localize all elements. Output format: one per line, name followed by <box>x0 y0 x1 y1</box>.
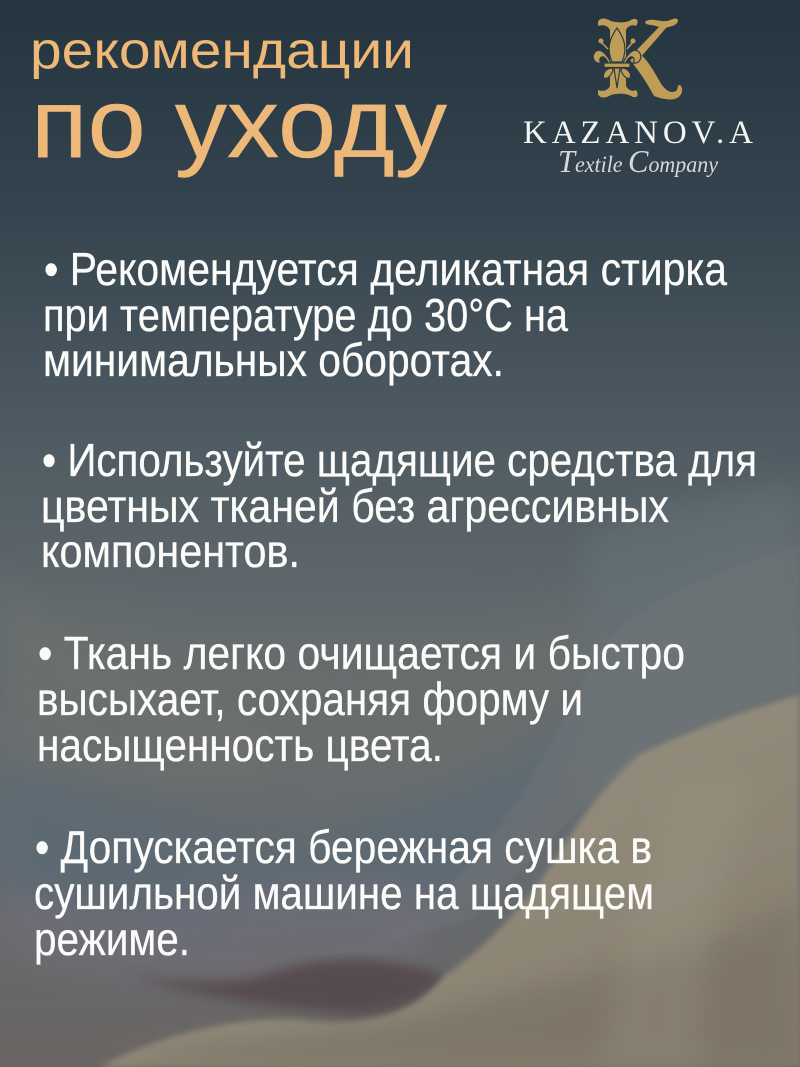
fleur-de-lis <box>593 28 641 88</box>
icon: gold monogram K with fleur-de-lis <box>593 18 682 99</box>
text block: fabric care <box>37 627 685 771</box>
heading: рекомендации по уходу <box>30 22 447 178</box>
text block: fabric care: • Ткань легко очищается и быстро <box>38 627 685 679</box>
text block: detergents: компонентов. <box>41 525 300 577</box>
arm and leg <box>632 18 678 58</box>
text block: drying <box>34 821 654 965</box>
text block: fabric care: насыщенность цвета. <box>37 719 443 771</box>
logo name: KAZANOV.A <box>523 115 753 151</box>
text block: detergents: цветных тканей без агрессивных <box>41 480 669 532</box>
text block: washing <box>43 243 727 386</box>
text block: washing: минимальных оборотах. <box>43 334 504 386</box>
text block: drying: режиме. <box>34 913 190 965</box>
top and bottom serifs <box>598 18 638 30</box>
heading line 1: рекомендации <box>30 22 414 80</box>
logo tagline: Textile Company <box>558 143 719 179</box>
logo: Kazanova Textile Company <box>523 18 753 179</box>
text block: drying: сушильной машине на щадящем <box>34 867 654 919</box>
text block: washing: при температуре до 30°С на <box>43 289 568 341</box>
text block: fabric care: высыхает, сохраняя форму и <box>37 673 583 725</box>
heading line 2: по уходу <box>31 68 447 178</box>
text block: detergents <box>41 434 757 577</box>
text block: drying: • Допускается бережная сушка в <box>35 821 652 873</box>
text block: washing: • Рекомендуется деликатная стирка <box>44 243 727 295</box>
